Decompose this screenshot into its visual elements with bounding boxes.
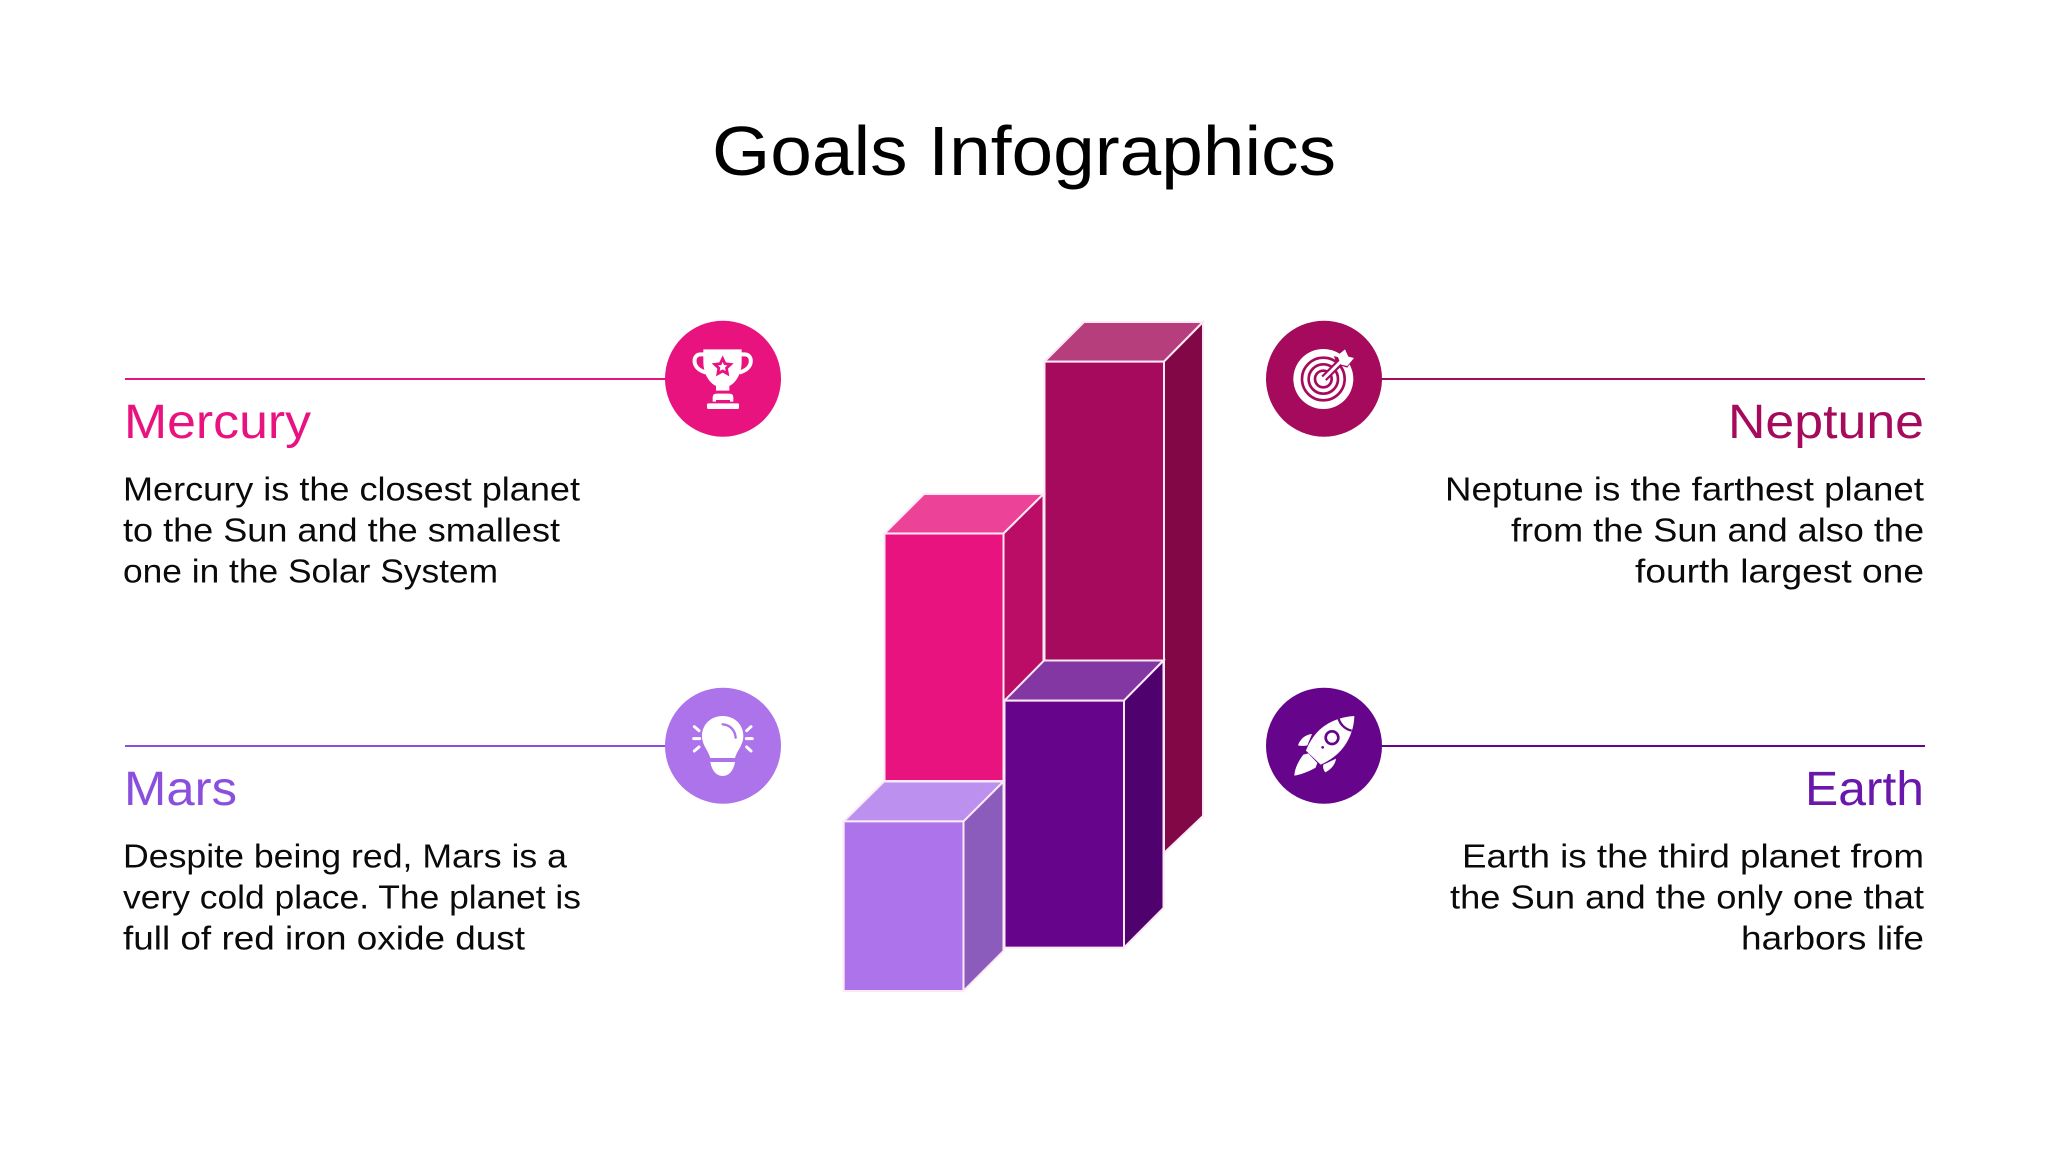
icon: trophy <box>665 321 781 437</box>
text block: Earth <box>1450 838 1924 957</box>
text block: Mercury: one in the Solar System <box>123 553 498 590</box>
bar: Mars (light purple) <box>844 782 1004 991</box>
panel: Earth <box>1266 688 1925 957</box>
text block: Mars: full of red iron oxide dust <box>123 920 525 957</box>
connector line: Mars <box>125 745 667 747</box>
text block: Mercury <box>123 471 580 590</box>
heading: Neptune: Neptune <box>1728 396 1924 449</box>
connector line: Neptune <box>1381 378 1925 380</box>
text block: Mercury: Mercury is the closest planet <box>123 471 580 508</box>
heading: Mars: Mars <box>124 763 237 816</box>
panel: Mercury <box>123 321 781 590</box>
title: Goals Infographics <box>712 112 1336 190</box>
text block: Earth: the Sun and the only one that <box>1450 879 1924 916</box>
heading: Mercury: Mercury <box>124 396 311 449</box>
connector line: Mercury <box>125 378 667 380</box>
text block: Neptune: fourth largest one <box>1635 553 1924 590</box>
connector line: Earth <box>1381 745 1925 747</box>
icon: light bulb <box>665 688 781 804</box>
heading: Earth: Earth <box>1805 763 1924 816</box>
text block: Mars: very cold place. The planet is <box>123 879 581 916</box>
text block: Mars: Despite being red, Mars is a <box>123 838 568 875</box>
3D bar chart <box>844 322 1203 991</box>
bar: Earth (dark purple) <box>1004 660 1164 948</box>
icon: rocket <box>1266 688 1382 804</box>
panel: Mars <box>123 688 781 957</box>
text block: Neptune: from the Sun and also the <box>1511 512 1924 549</box>
text block: Mercury: to the Sun and the smallest <box>123 512 560 549</box>
text block: Earth: harbors life <box>1741 920 1924 957</box>
text block: Mars <box>123 838 581 957</box>
text block: Neptune: Neptune is the farthest planet <box>1445 471 1924 508</box>
text block: Neptune <box>1445 471 1924 590</box>
panel: Neptune <box>1266 321 1925 590</box>
bar: Mercury (pink) <box>884 494 1044 781</box>
text block: Earth: Earth is the third planet from <box>1462 838 1924 875</box>
icon: target <box>1266 321 1382 437</box>
bar: Neptune (tallest, crimson) <box>1044 322 1203 853</box>
